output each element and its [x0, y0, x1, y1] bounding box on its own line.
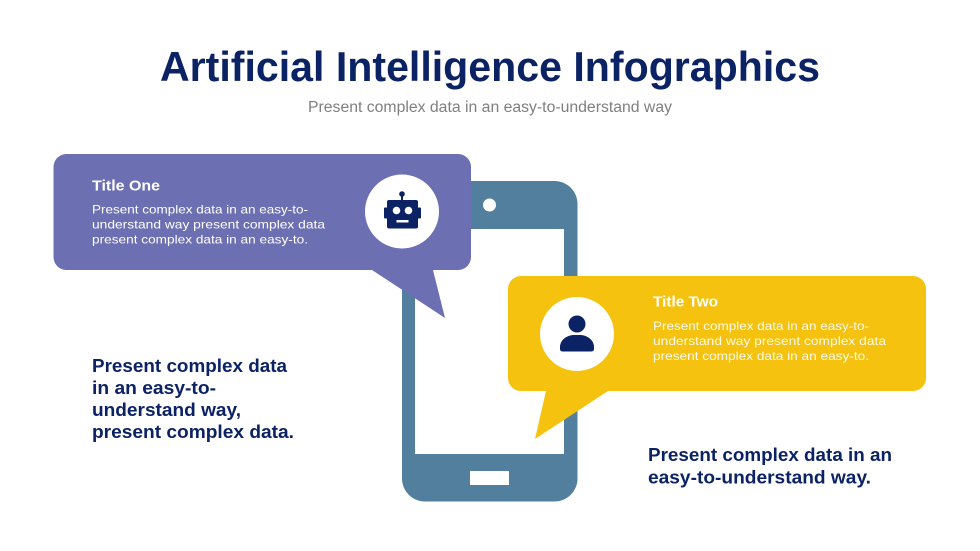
panel: title one speech bubble	[54, 154, 471, 318]
title: Artificial Intelligence Infographics	[160, 43, 820, 90]
text block: title one body: present complex data in an easy-to.	[92, 232, 308, 246]
panel: title two speech bubble	[508, 276, 926, 439]
text block: title one body: Present complex data in an easy-to-	[92, 202, 308, 216]
text block: right statement: easy-to-understand way.	[648, 468, 871, 488]
text block: left statement: in an easy-to-	[92, 378, 216, 398]
text block: title one body: understand way present complex data	[92, 218, 325, 232]
text block: left statement: present complex data.	[92, 422, 294, 442]
text block: right statement	[648, 445, 892, 488]
icon: person	[540, 297, 614, 371]
heading: title two: Title Two	[653, 294, 718, 310]
icon: smartphone	[402, 181, 578, 502]
text block: right statement: Present complex data in an	[648, 445, 892, 465]
heading: title one: Title One	[92, 178, 160, 194]
text block: title two body: Present complex data in an easy-to-	[653, 319, 869, 333]
icon: robot	[365, 174, 439, 248]
text block: title one body	[92, 202, 325, 246]
text block: title two body: present complex data in an easy-to.	[653, 349, 869, 363]
text block: title two body: understand way present complex data	[653, 334, 886, 348]
text block: left statement	[92, 356, 294, 442]
text block: left statement: Present complex data	[92, 356, 288, 376]
text block: left statement: understand way,	[92, 400, 241, 420]
text block: title two body	[653, 319, 886, 363]
subtitle: Present complex data in an easy-to-understand way	[308, 99, 672, 116]
